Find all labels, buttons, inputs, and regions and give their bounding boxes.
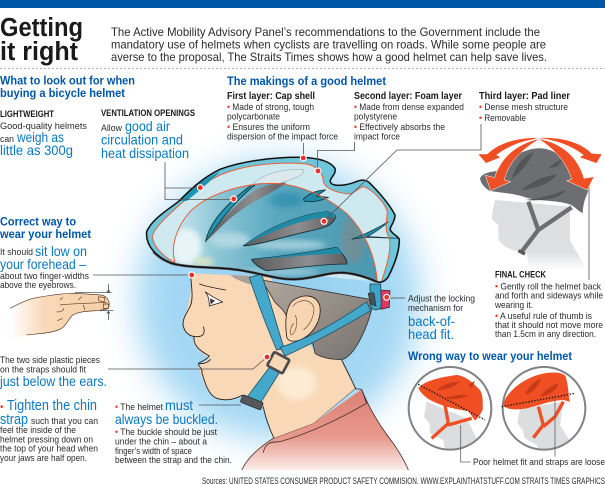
shirt bbox=[242, 389, 408, 470]
buckle text: must bbox=[165, 397, 193, 413]
diagram: tilted back bbox=[409, 367, 491, 452]
forehead text: your forehead – bbox=[0, 256, 86, 272]
forehead text: sit low on bbox=[35, 243, 87, 259]
leader lines bbox=[93, 124, 589, 405]
third layer text: Third layer: Pad liner bbox=[479, 91, 570, 102]
heading: correct way: Correct way to bbox=[0, 214, 76, 228]
chin strap text: • bbox=[0, 402, 4, 413]
icon: two-finger hand bbox=[10, 284, 113, 340]
buckle text: under the chin – about a bbox=[115, 436, 208, 446]
buckle text: finger’s width of space bbox=[115, 446, 192, 456]
intro text bbox=[111, 25, 547, 64]
hair bbox=[262, 280, 373, 359]
heading: correct way bbox=[0, 214, 91, 241]
head silhouette bbox=[492, 200, 587, 270]
final check text bbox=[494, 270, 603, 339]
inner liner bbox=[173, 183, 377, 282]
lower vent bbox=[252, 247, 347, 271]
heading: what to look out for: What to look out for when bbox=[0, 74, 135, 88]
intro text: The Active Mobility Advisory Panel’s recommendations to the Government include the bbox=[111, 25, 540, 39]
locking mechanism text: mechanism for bbox=[408, 303, 463, 313]
third layer text bbox=[479, 91, 570, 123]
shirt outline bbox=[242, 389, 408, 470]
teal brow band bbox=[179, 172, 220, 201]
grey helmet diagram bbox=[478, 138, 602, 270]
locking mechanism text: back-of- bbox=[408, 313, 455, 329]
ventilation text: circulation and bbox=[101, 132, 183, 148]
title: Getting bbox=[0, 14, 83, 42]
rear lock bbox=[368, 284, 390, 310]
third layer text: • Dense mesh structure bbox=[479, 102, 568, 112]
ventilation text: heat dissipation bbox=[101, 145, 189, 161]
lightweight text: LIGHTWEIGHT bbox=[0, 109, 54, 119]
chin strap text bbox=[0, 397, 98, 463]
ventilation text: good air bbox=[125, 118, 170, 134]
buckle text: always be buckled. bbox=[115, 411, 218, 427]
first layer text: • Ensures the uniform bbox=[227, 122, 310, 132]
chin strap text: the top of your head when bbox=[0, 444, 98, 454]
heading: wrong way: Wrong way to wear your helmet bbox=[408, 349, 572, 363]
buckle text: • The buckle should be just bbox=[115, 427, 217, 437]
top banner bar bbox=[0, 0, 605, 8]
chin strap text: helmet pressing down on bbox=[0, 434, 93, 444]
chin strap text: feel the inside of the bbox=[0, 425, 76, 435]
callout dots bbox=[189, 155, 390, 360]
illustration: boy's head and shoulders bbox=[183, 273, 408, 470]
illustration: helmet bbox=[147, 157, 399, 310]
heading: makings of a good helmet: The makings of a good helmet bbox=[227, 74, 386, 88]
measure arrows bbox=[75, 284, 113, 320]
forehead text bbox=[0, 243, 89, 290]
helmet bbox=[480, 148, 588, 213]
side pieces text: just below the ears. bbox=[0, 373, 107, 389]
first layer text bbox=[227, 91, 338, 142]
middle vent bbox=[243, 212, 336, 246]
second layer text: polystyrene bbox=[354, 112, 397, 122]
straps bbox=[522, 202, 572, 252]
helmet outline bbox=[147, 157, 399, 282]
heading: what to look out for: buying a bicycle helmet bbox=[0, 86, 125, 100]
chin strap text: your jaws are half open. bbox=[0, 453, 87, 463]
ventilation text bbox=[101, 108, 195, 161]
orange layer lines bbox=[152, 163, 390, 282]
foam layer bbox=[152, 163, 390, 282]
top vent, outer layer bbox=[253, 169, 304, 183]
illustration: background glow bbox=[106, 130, 450, 470]
buckle text: • The helmet bbox=[115, 402, 163, 412]
lightweight text: weigh as bbox=[16, 129, 64, 145]
locking mechanism text bbox=[408, 294, 475, 342]
ear bbox=[286, 296, 320, 341]
upper rear vent bbox=[303, 190, 328, 202]
forehead text: above the eyebrows. bbox=[0, 280, 76, 290]
first layer text: • Made of strong, tough bbox=[227, 102, 314, 112]
locking mechanism text: head fit. bbox=[408, 326, 454, 342]
third layer text: • Removable bbox=[479, 113, 526, 123]
second layer text: • Effectively absorbs the bbox=[354, 122, 445, 132]
callout lines bbox=[461, 398, 555, 462]
final check text: than 1.5cm in any direction. bbox=[495, 329, 596, 339]
title: it right bbox=[0, 38, 78, 66]
buckle text bbox=[115, 397, 232, 465]
title bbox=[0, 14, 83, 66]
final check text: FINAL CHECK bbox=[495, 270, 546, 280]
vents bbox=[512, 153, 565, 200]
rolling arrows bbox=[478, 138, 602, 191]
second layer text: • Made from dense expanded bbox=[354, 102, 464, 112]
locking mechanism text: Adjust the locking bbox=[408, 294, 475, 304]
side pieces text bbox=[0, 355, 107, 389]
helmet rim bbox=[153, 252, 377, 282]
second layer text: Second layer: Foam layer bbox=[354, 91, 462, 102]
lightweight text: little as 300g bbox=[0, 142, 73, 158]
front vent bbox=[206, 183, 287, 242]
rear vent bbox=[352, 222, 398, 239]
first layer text: First layer: Cap shell bbox=[227, 91, 315, 102]
chin strap text: Tighten the chin bbox=[7, 397, 97, 414]
face and neck bbox=[183, 273, 355, 438]
lightweight text: can bbox=[0, 134, 14, 144]
eye and brow bbox=[199, 284, 226, 306]
chin buckle bbox=[240, 395, 263, 410]
ventilation text: VENTILATION OPENINGS bbox=[101, 108, 195, 118]
ventilation text: Allow bbox=[101, 123, 122, 133]
side pieces text: The two side plastic pieces bbox=[0, 355, 100, 365]
lightweight text bbox=[0, 109, 87, 158]
intro text: mandatory use of helmets when cyclists are travelling on roads. While some people are bbox=[111, 38, 546, 52]
straps bbox=[247, 274, 371, 403]
heading: what to look out for bbox=[0, 74, 135, 100]
heading: correct way: wear your helmet bbox=[0, 227, 91, 241]
chin strap text: such that you can bbox=[31, 416, 98, 426]
side buckle bbox=[267, 352, 290, 374]
forehead text: about two finger-widths bbox=[0, 271, 89, 281]
diagram: tilted forward bbox=[502, 367, 585, 452]
final check text: wearing it. bbox=[494, 300, 533, 310]
second layer text bbox=[354, 91, 464, 142]
lightweight text: Good-quality helmets bbox=[0, 121, 87, 131]
first layer text: polycarbonate bbox=[227, 112, 280, 122]
intro text: averse to the proposal, The Straits Times shows how a good helmet can help save lives. bbox=[111, 50, 547, 64]
second layer text: impact force bbox=[354, 132, 400, 142]
forehead text: It should bbox=[0, 247, 33, 257]
side pieces text: on the straps should fit bbox=[0, 364, 86, 374]
chin strap text: strap bbox=[0, 411, 28, 428]
wrong fit diagrams bbox=[409, 367, 585, 462]
face outline bbox=[183, 277, 356, 438]
first layer text: dispersion of the impact force bbox=[227, 132, 338, 142]
buckle text: between the strap and the chin. bbox=[115, 455, 232, 465]
final check text: • A useful rule of thumb is bbox=[495, 311, 592, 321]
outer shell bbox=[147, 157, 399, 282]
